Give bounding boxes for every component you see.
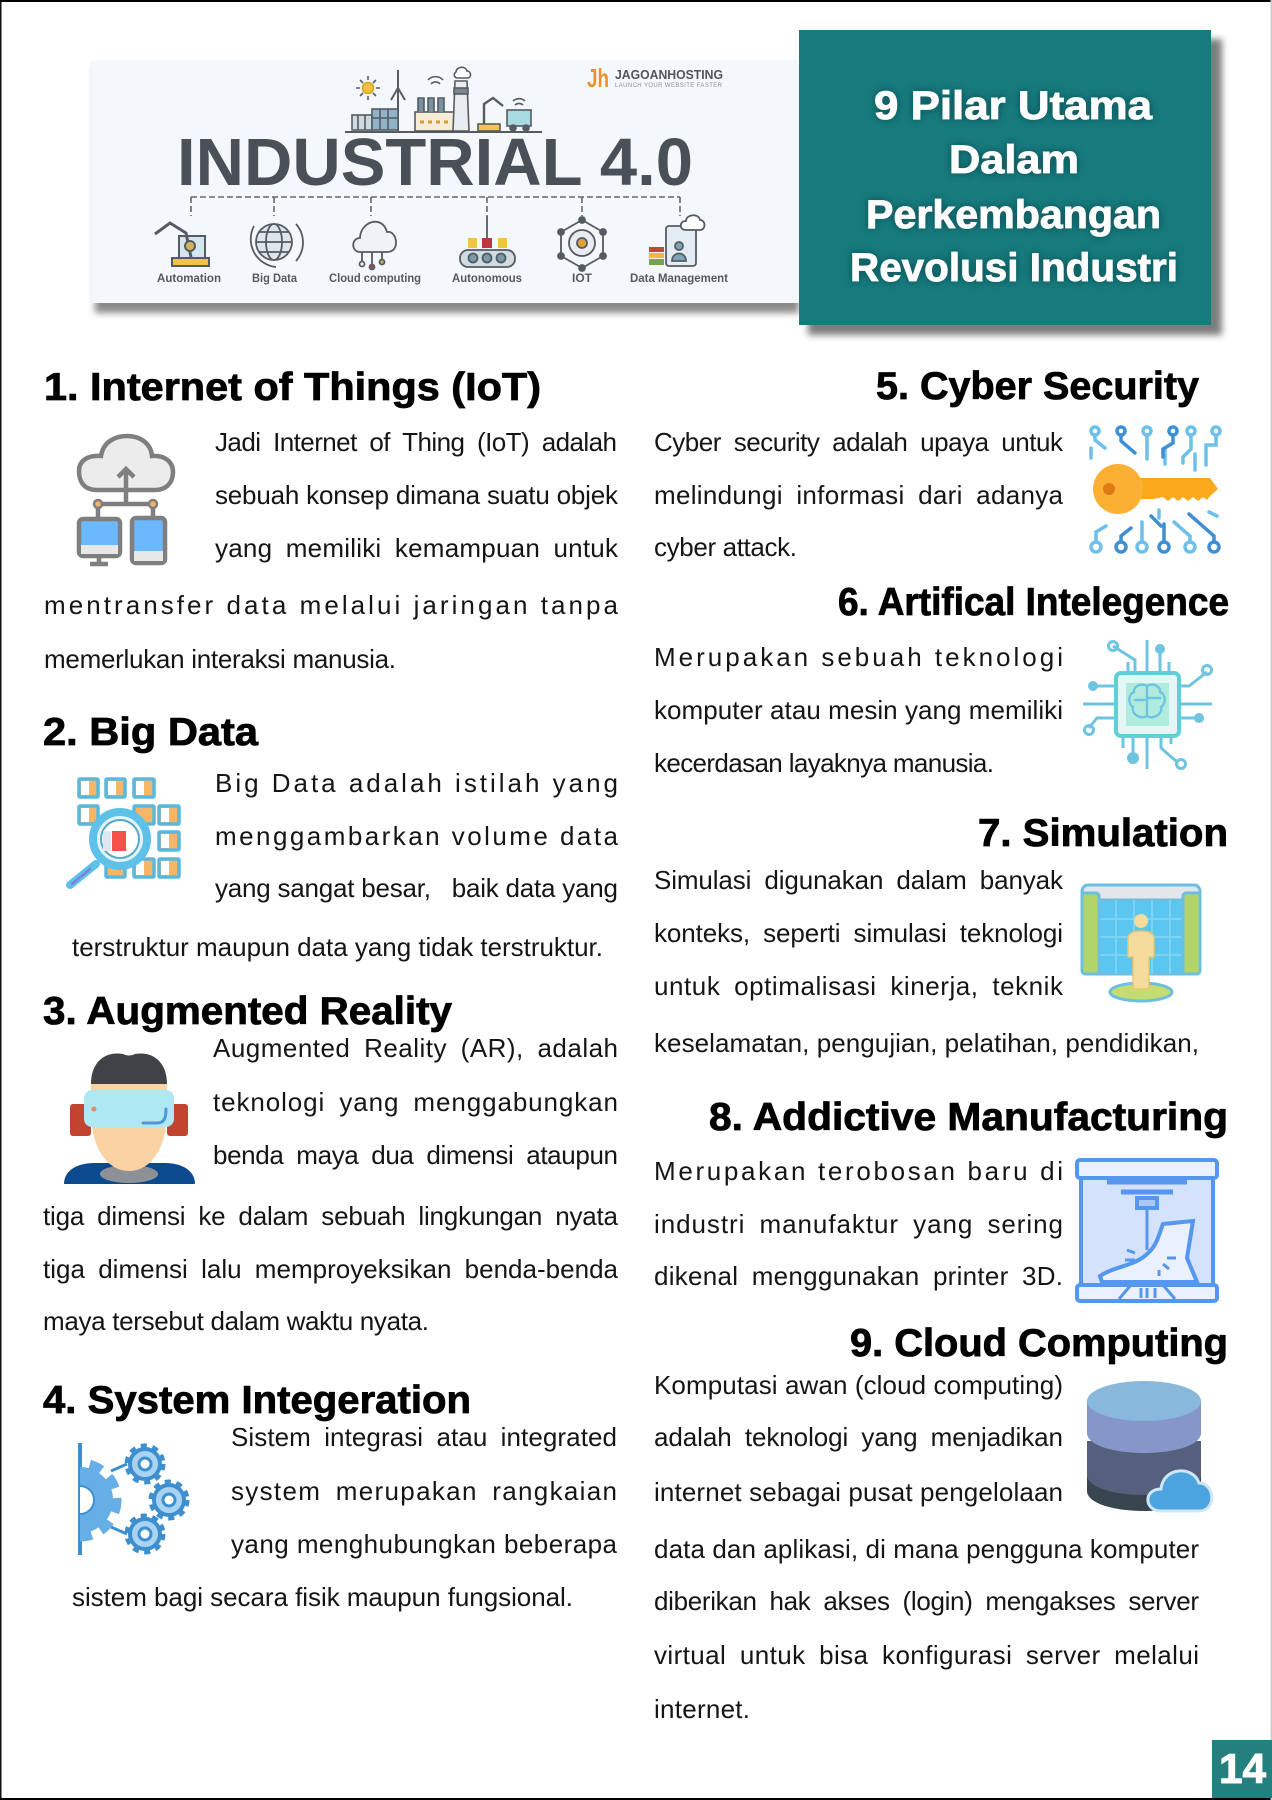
text block: adalah teknologi yang menjadikan <box>654 1422 1063 1452</box>
icon: magnifier over data grid <box>70 779 179 885</box>
icon: person with VR headset <box>64 1054 195 1184</box>
text block: menggambarkan volume data <box>215 821 619 851</box>
icon: cloud computing <box>353 222 396 270</box>
text block <box>654 1370 1199 1724</box>
banner icon labels: IOT <box>572 273 592 285</box>
text block: Augmented Reality (AR), adalah <box>213 1033 618 1063</box>
text block: cyber attack. <box>654 532 797 562</box>
text block: Simulasi digunakan dalam banyak <box>654 865 1064 895</box>
icon: autonomous <box>460 216 515 267</box>
text block <box>72 1422 618 1612</box>
text block: konteks, seperti simulasi teknologi <box>654 918 1063 948</box>
banner icon labels: Automation <box>157 273 221 285</box>
text block: terstruktur maupun data yang tidak terstruktur. <box>72 932 603 962</box>
panel: 5 Cyber Security <box>654 365 1220 562</box>
text block: tiga dimensi ke dalam sebuah lingkungan nyata <box>43 1201 619 1231</box>
icon: 3D printer <box>1077 1160 1217 1301</box>
text block: internet. <box>654 1694 750 1724</box>
icon: digital key <box>1091 427 1220 552</box>
text block: diberikan hak akses (login) mengakses server <box>654 1586 1199 1616</box>
text block: untuk optimalisasi kinerja, teknik <box>654 971 1064 1001</box>
banner icon labels <box>157 273 728 285</box>
text block <box>654 427 1064 562</box>
text block: benda maya dua dimensi ataupun <box>213 1140 618 1170</box>
panel: 7 Simulation <box>654 812 1228 1058</box>
icon: database with cloud <box>1087 1381 1212 1511</box>
text block: teknologi yang menggabungkan <box>213 1087 618 1117</box>
text block: melindungi informasi dari adanya <box>654 480 1064 510</box>
text block: Jadi Internet of Thing (IoT) adalah <box>215 427 617 457</box>
icon: brain chip <box>1083 640 1212 769</box>
heading: Artifical Intelegence: 6. Artifical Intelegence <box>838 581 1229 624</box>
text block: Komputasi awan (cloud computing) <box>654 1370 1063 1400</box>
text block: Merupakan terobosan baru di <box>654 1156 1063 1186</box>
heading: Simulation: 7. Simulation <box>978 812 1228 855</box>
text block: tiga dimensi lalu memproyeksikan benda-benda <box>43 1254 619 1284</box>
logo: Jagoan Hosting: JAGOANHOSTING <box>615 67 723 82</box>
logo: Jagoan Hosting: Jh <box>587 63 609 93</box>
text block: yang sangat besar, baik data yang <box>215 873 618 903</box>
icon: automation <box>155 223 209 266</box>
icon: data management <box>649 215 704 266</box>
text block: yang memiliki kemampuan untuk <box>215 533 619 563</box>
text block <box>654 865 1199 1058</box>
banner icon labels: Big Data <box>252 273 298 285</box>
title: Revolusi Industri <box>850 246 1178 290</box>
text block: virtual untuk bisa konfigurasi server melalui <box>654 1640 1199 1670</box>
text block: Sistem integrasi atau integrated <box>231 1422 617 1452</box>
logo: Jagoan Hosting <box>587 63 723 93</box>
heading: System Integeration: 4. System Integeration <box>43 1379 471 1422</box>
header illustration: Industrial 4.0 banner <box>91 61 799 313</box>
text block <box>654 642 1063 778</box>
heading: Addictive Manufacturing: 8. Addictive Manufacturing <box>709 1096 1228 1139</box>
text block: Big Data adalah istilah yang <box>215 768 618 798</box>
banner icon labels: Autonomous <box>452 273 522 285</box>
dashed connector tree <box>191 197 680 216</box>
text block: system merupakan rangkaian <box>231 1476 617 1506</box>
heading: Augmented Reality: 3. Augmented Reality <box>43 990 452 1033</box>
banner icon labels: Cloud computing <box>329 273 421 285</box>
page number <box>1212 1740 1272 1798</box>
text block: mentransfer data melalui jaringan tanpa <box>44 590 619 620</box>
banner icon labels: Data Management <box>630 273 728 285</box>
heading: Internet of Things: 1. Internet of Things (IoT) <box>44 366 541 409</box>
text block: data dan aplikasi, di mana pengguna komputer <box>654 1534 1199 1564</box>
panel: 4 System Integration <box>43 1379 618 1612</box>
logo: Jagoan Hosting: LAUNCH YOUR WEBSITE FASTER <box>615 83 723 89</box>
icon: simulation screen with person <box>1082 885 1200 1001</box>
panel: 3 Augmented Reality <box>43 990 619 1336</box>
text block: keselamatan, pengujian, pelatihan, pendidikan, <box>654 1028 1199 1058</box>
text block: memerlukan interaksi manusia. <box>44 644 396 674</box>
panel: title box <box>799 30 1222 335</box>
text block <box>654 1156 1063 1291</box>
heading: Cloud Computing: 9. Cloud Computing <box>850 1322 1228 1365</box>
text block: maya tersebut dalam waktu nyata. <box>43 1306 429 1336</box>
panel: 1 Internet of Things <box>44 366 619 674</box>
title: 9 Pilar Utama <box>874 84 1153 128</box>
text block: sebuah konsep dimana suatu objek <box>215 480 619 510</box>
text block: kecerdasan layaknya manusia. <box>654 748 994 778</box>
text block: internet sebagai pusat pengelolaan <box>654 1477 1063 1507</box>
text block <box>43 1033 619 1336</box>
title: Dalam <box>949 138 1079 182</box>
text block: komputer atau mesin yang memiliki <box>654 695 1063 725</box>
panel: 6 Artificial Intelligence <box>654 581 1229 778</box>
text block <box>44 427 619 674</box>
text block: Merupakan sebuah teknologi <box>654 642 1063 672</box>
icon: cloud and devices <box>79 436 173 564</box>
heading: Cyber Security: 5. Cyber Security <box>876 365 1199 408</box>
page number: 14 <box>1219 1745 1267 1792</box>
banner skyline illustration <box>345 67 542 132</box>
panel: 2 Big Data <box>43 711 619 962</box>
title <box>850 84 1178 290</box>
text block: dikenal menggunakan printer 3D. <box>654 1261 1063 1291</box>
text block: sistem bagi secara fisik maupun fungsional. <box>72 1582 573 1612</box>
heading: Big Data: 2. Big Data <box>43 711 258 754</box>
text block: yang menghubungkan beberapa <box>231 1529 618 1559</box>
icon: big data <box>251 224 303 267</box>
banner heading: INDUSTRIAL 4.0 <box>177 125 693 200</box>
text block: industri manufaktur yang sering <box>654 1209 1063 1239</box>
title: Perkembangan <box>866 193 1161 237</box>
icon: IOT <box>558 217 606 271</box>
text block <box>72 768 619 962</box>
panel: 8 Additive Manufacturing <box>654 1096 1228 1301</box>
panel: 9 Cloud Computing <box>654 1322 1228 1724</box>
text block: Cyber security adalah upaya untuk <box>654 427 1064 457</box>
icon: connected gears <box>78 1443 190 1555</box>
